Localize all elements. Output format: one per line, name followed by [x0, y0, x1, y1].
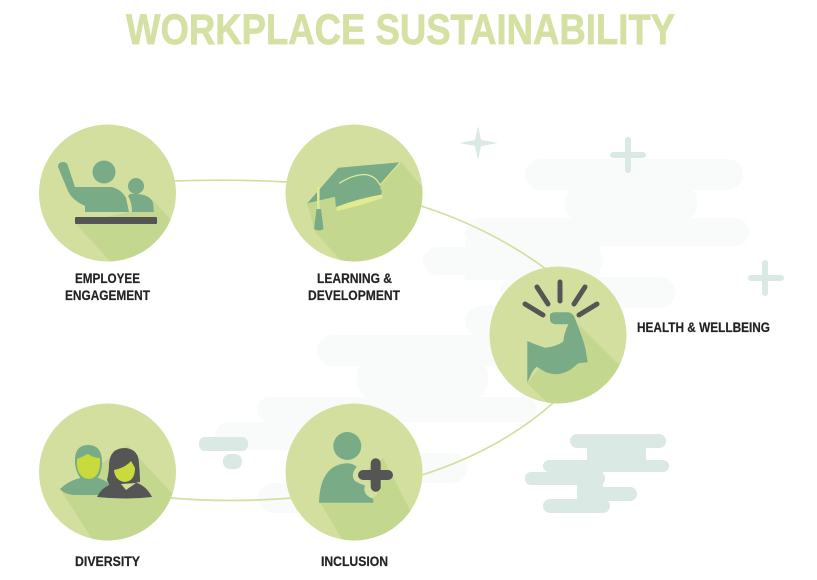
panel: employee engagement [39, 124, 185, 303]
label: ENGAGEMENT [65, 288, 151, 303]
label: HEALTH & WELLBEING [637, 320, 770, 335]
panel: inclusion [286, 404, 422, 569]
background: pale clouds [215, 159, 749, 513]
background: teal cloud [525, 434, 669, 513]
icon: four-point star [459, 126, 498, 160]
icon: man and woman [60, 445, 152, 498]
label: INCLUSION [321, 554, 388, 569]
label: DIVERSITY [75, 554, 140, 569]
panel: diversity [39, 404, 178, 569]
panel: learning and development [286, 124, 432, 303]
label [308, 271, 401, 303]
icon: person with plus [319, 432, 388, 503]
label: EMPLOYEE [75, 271, 140, 286]
icon: raised hand people at desk [58, 160, 157, 224]
panel: health and wellbeing [490, 266, 770, 412]
icon: flexed arm with rays [525, 282, 597, 382]
label: DEVELOPMENT [308, 288, 401, 303]
label: LEARNING & [317, 271, 392, 286]
icon: plus sparkle right [751, 263, 781, 293]
connecting ring line [171, 180, 553, 500]
background: small teal cloud [199, 437, 248, 469]
icon: plus sparkle top [613, 140, 643, 170]
label [65, 271, 151, 303]
icon: graduation cap [307, 162, 400, 230]
title: WORKPLACE SUSTAINABILITY [126, 6, 675, 54]
